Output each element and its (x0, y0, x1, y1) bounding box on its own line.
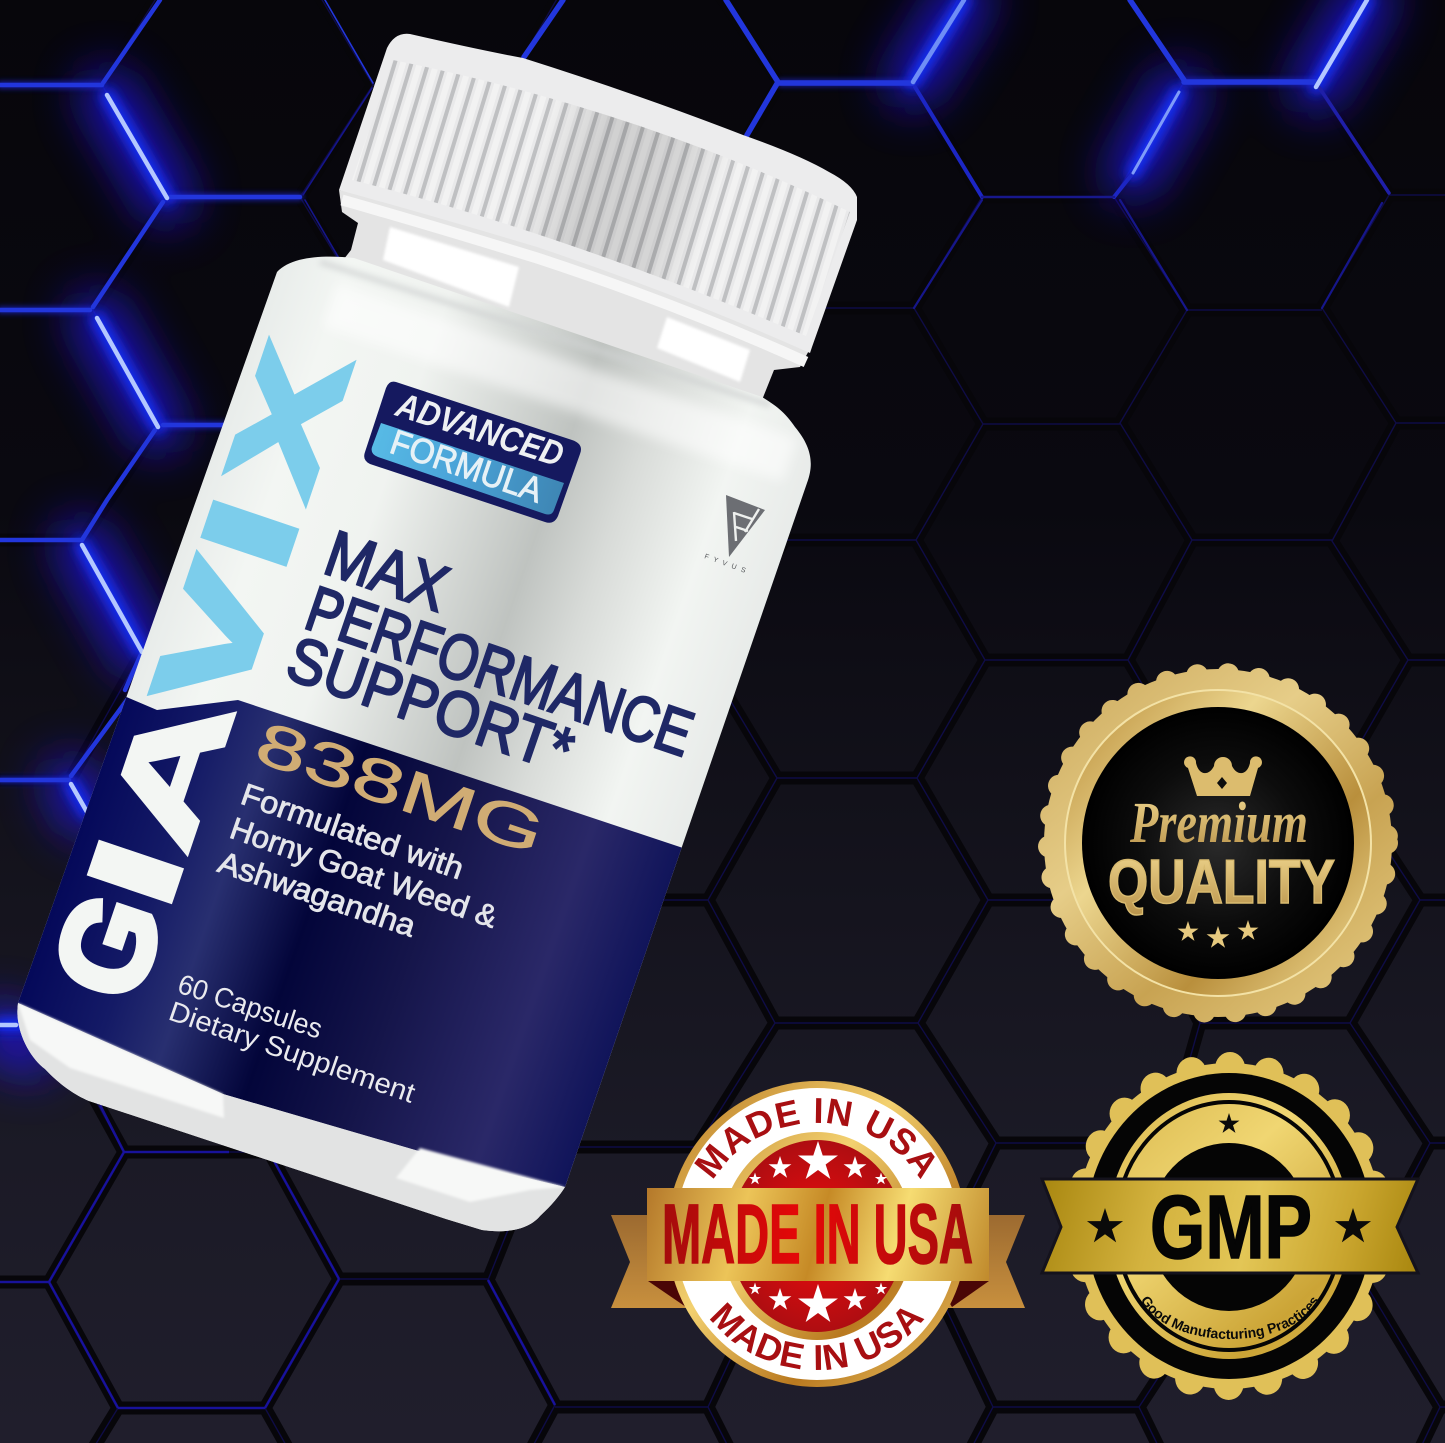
badge: GMP (1040, 1052, 1420, 1400)
rim highlights (18, 1003, 565, 1202)
badge: advanced formula (364, 382, 581, 523)
text: formula: FORMULA (385, 423, 548, 511)
neon glow lines (0, 0, 1389, 1050)
ribbon tails (611, 1215, 690, 1308)
navy label band (18, 697, 682, 1187)
headline: MAX (316, 516, 457, 625)
cap skirt (342, 200, 806, 362)
text: good manufacturing practices: Good Manufacturing Practices (1142, 1296, 1318, 1340)
text: made in USA: MADE IN USA (662, 1187, 973, 1281)
seal (667, 1081, 967, 1387)
ingredients text: Horny Goat Weed & (226, 811, 502, 935)
text: quality: QUALITY (1108, 848, 1335, 917)
logo: fyvus (703, 495, 765, 576)
capsule count: Dietary Supplement (165, 995, 419, 1109)
GMP ribbon (1042, 1179, 1418, 1273)
icon: crown (1184, 756, 1262, 796)
headline: PERFORMANCE (297, 572, 702, 770)
ingredients text: Ashwagandha (214, 844, 421, 944)
ingredients text: Formulated with (237, 777, 468, 886)
brand name letter G: G (25, 877, 191, 1015)
brand name letters VIX: VIX (125, 328, 378, 729)
ribbon stars (1087, 1208, 1371, 1242)
main ribbon (647, 1188, 989, 1281)
headline: SUPPORT* (278, 622, 583, 787)
badge: made in USA (611, 1081, 1025, 1387)
bottle body (0, 240, 840, 1250)
product bottle (0, 34, 857, 1250)
logo: fyvus: FYVUS (703, 553, 751, 576)
top star (1219, 1113, 1239, 1133)
dosage: 838MG: 838MG (248, 709, 553, 867)
text: GMP: GMP (1150, 1178, 1312, 1278)
bottle cap (339, 34, 857, 353)
bottom rim (17, 1003, 565, 1232)
curved text top: MADE IN USA (694, 1098, 935, 1179)
shoulder shading (430, 327, 788, 472)
text: advanced: ADVANCED (391, 385, 568, 475)
badge: premium quality (1044, 669, 1392, 1017)
bottle neck (339, 190, 812, 400)
three stars (1178, 920, 1258, 948)
ingredients text (214, 777, 502, 944)
text: premium: Premium (1129, 790, 1308, 855)
curved text bottom: MADE IN USA (710, 1302, 924, 1370)
neck highlights (383, 227, 750, 382)
headline (278, 516, 702, 787)
white stars (749, 1141, 887, 1322)
capsule count: 60 Capsules (174, 968, 326, 1045)
brand name letters IA: IA (60, 674, 261, 923)
